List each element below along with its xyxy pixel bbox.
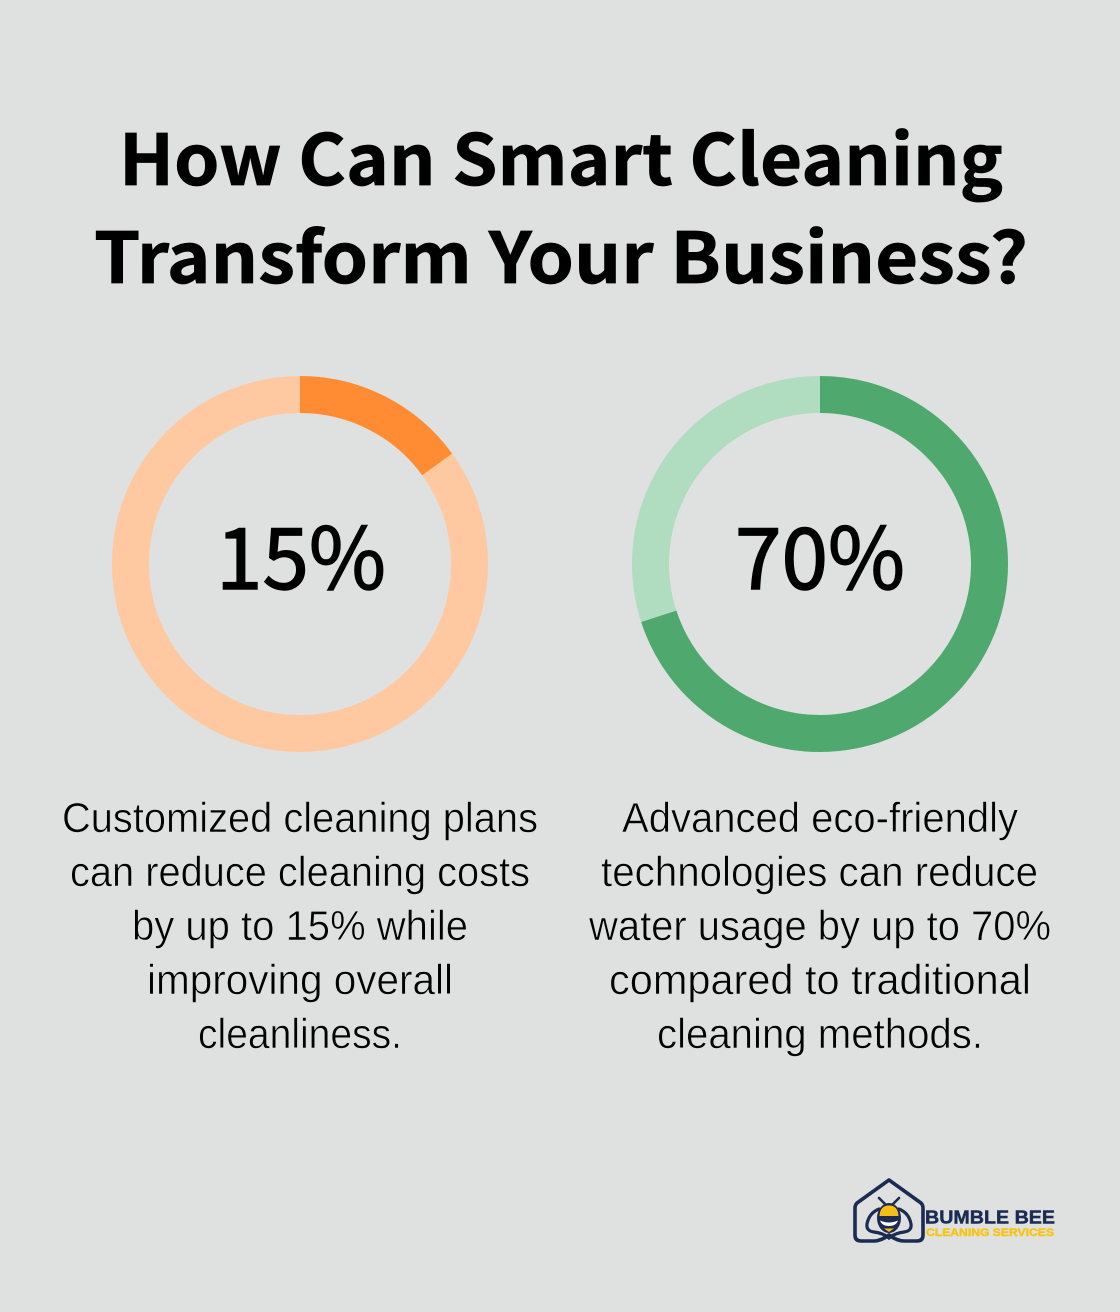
logo: Bumble Bee Cleaning Services: BUMBLE BEE [925,1206,1055,1228]
text block: eco-friendly technologies [588,794,1051,1057]
title: How Can Smart Cleaning [119,105,1003,206]
text block: eco-friendly technologies: cleaning methods. [657,1010,983,1057]
donut chart: 70%: 70% [735,491,905,614]
text block: eco-friendly technologies: water usage by up to 70% [588,902,1051,949]
text block: customized cleaning plans: Customized cleaning plans [62,794,538,841]
logo: Bumble Bee Cleaning Services [855,1180,1055,1241]
title [94,105,1028,304]
text block: eco-friendly technologies: technologies can reduce [601,848,1038,895]
text block: eco-friendly technologies: Advanced eco-friendly [622,794,1018,841]
text block: customized cleaning plans: can reduce cleaning costs [70,848,530,895]
title: Transform Your Business? [94,203,1028,304]
text block: customized cleaning plans: cleanliness. [198,1010,402,1057]
icon: house with bee [855,1180,923,1241]
text block: customized cleaning plans [62,794,538,1057]
donut chart: 15%: 15% [216,491,386,614]
text block: customized cleaning plans: improving overall [147,956,453,1003]
donut chart: 15% [130,394,470,734]
donut chart: 70% [650,394,990,734]
text block: customized cleaning plans: by up to 15% while [132,902,468,949]
logo: Bumble Bee Cleaning Services: CLEANING SERVICES [926,1227,1054,1239]
text block: eco-friendly technologies: compared to traditional [609,956,1031,1003]
